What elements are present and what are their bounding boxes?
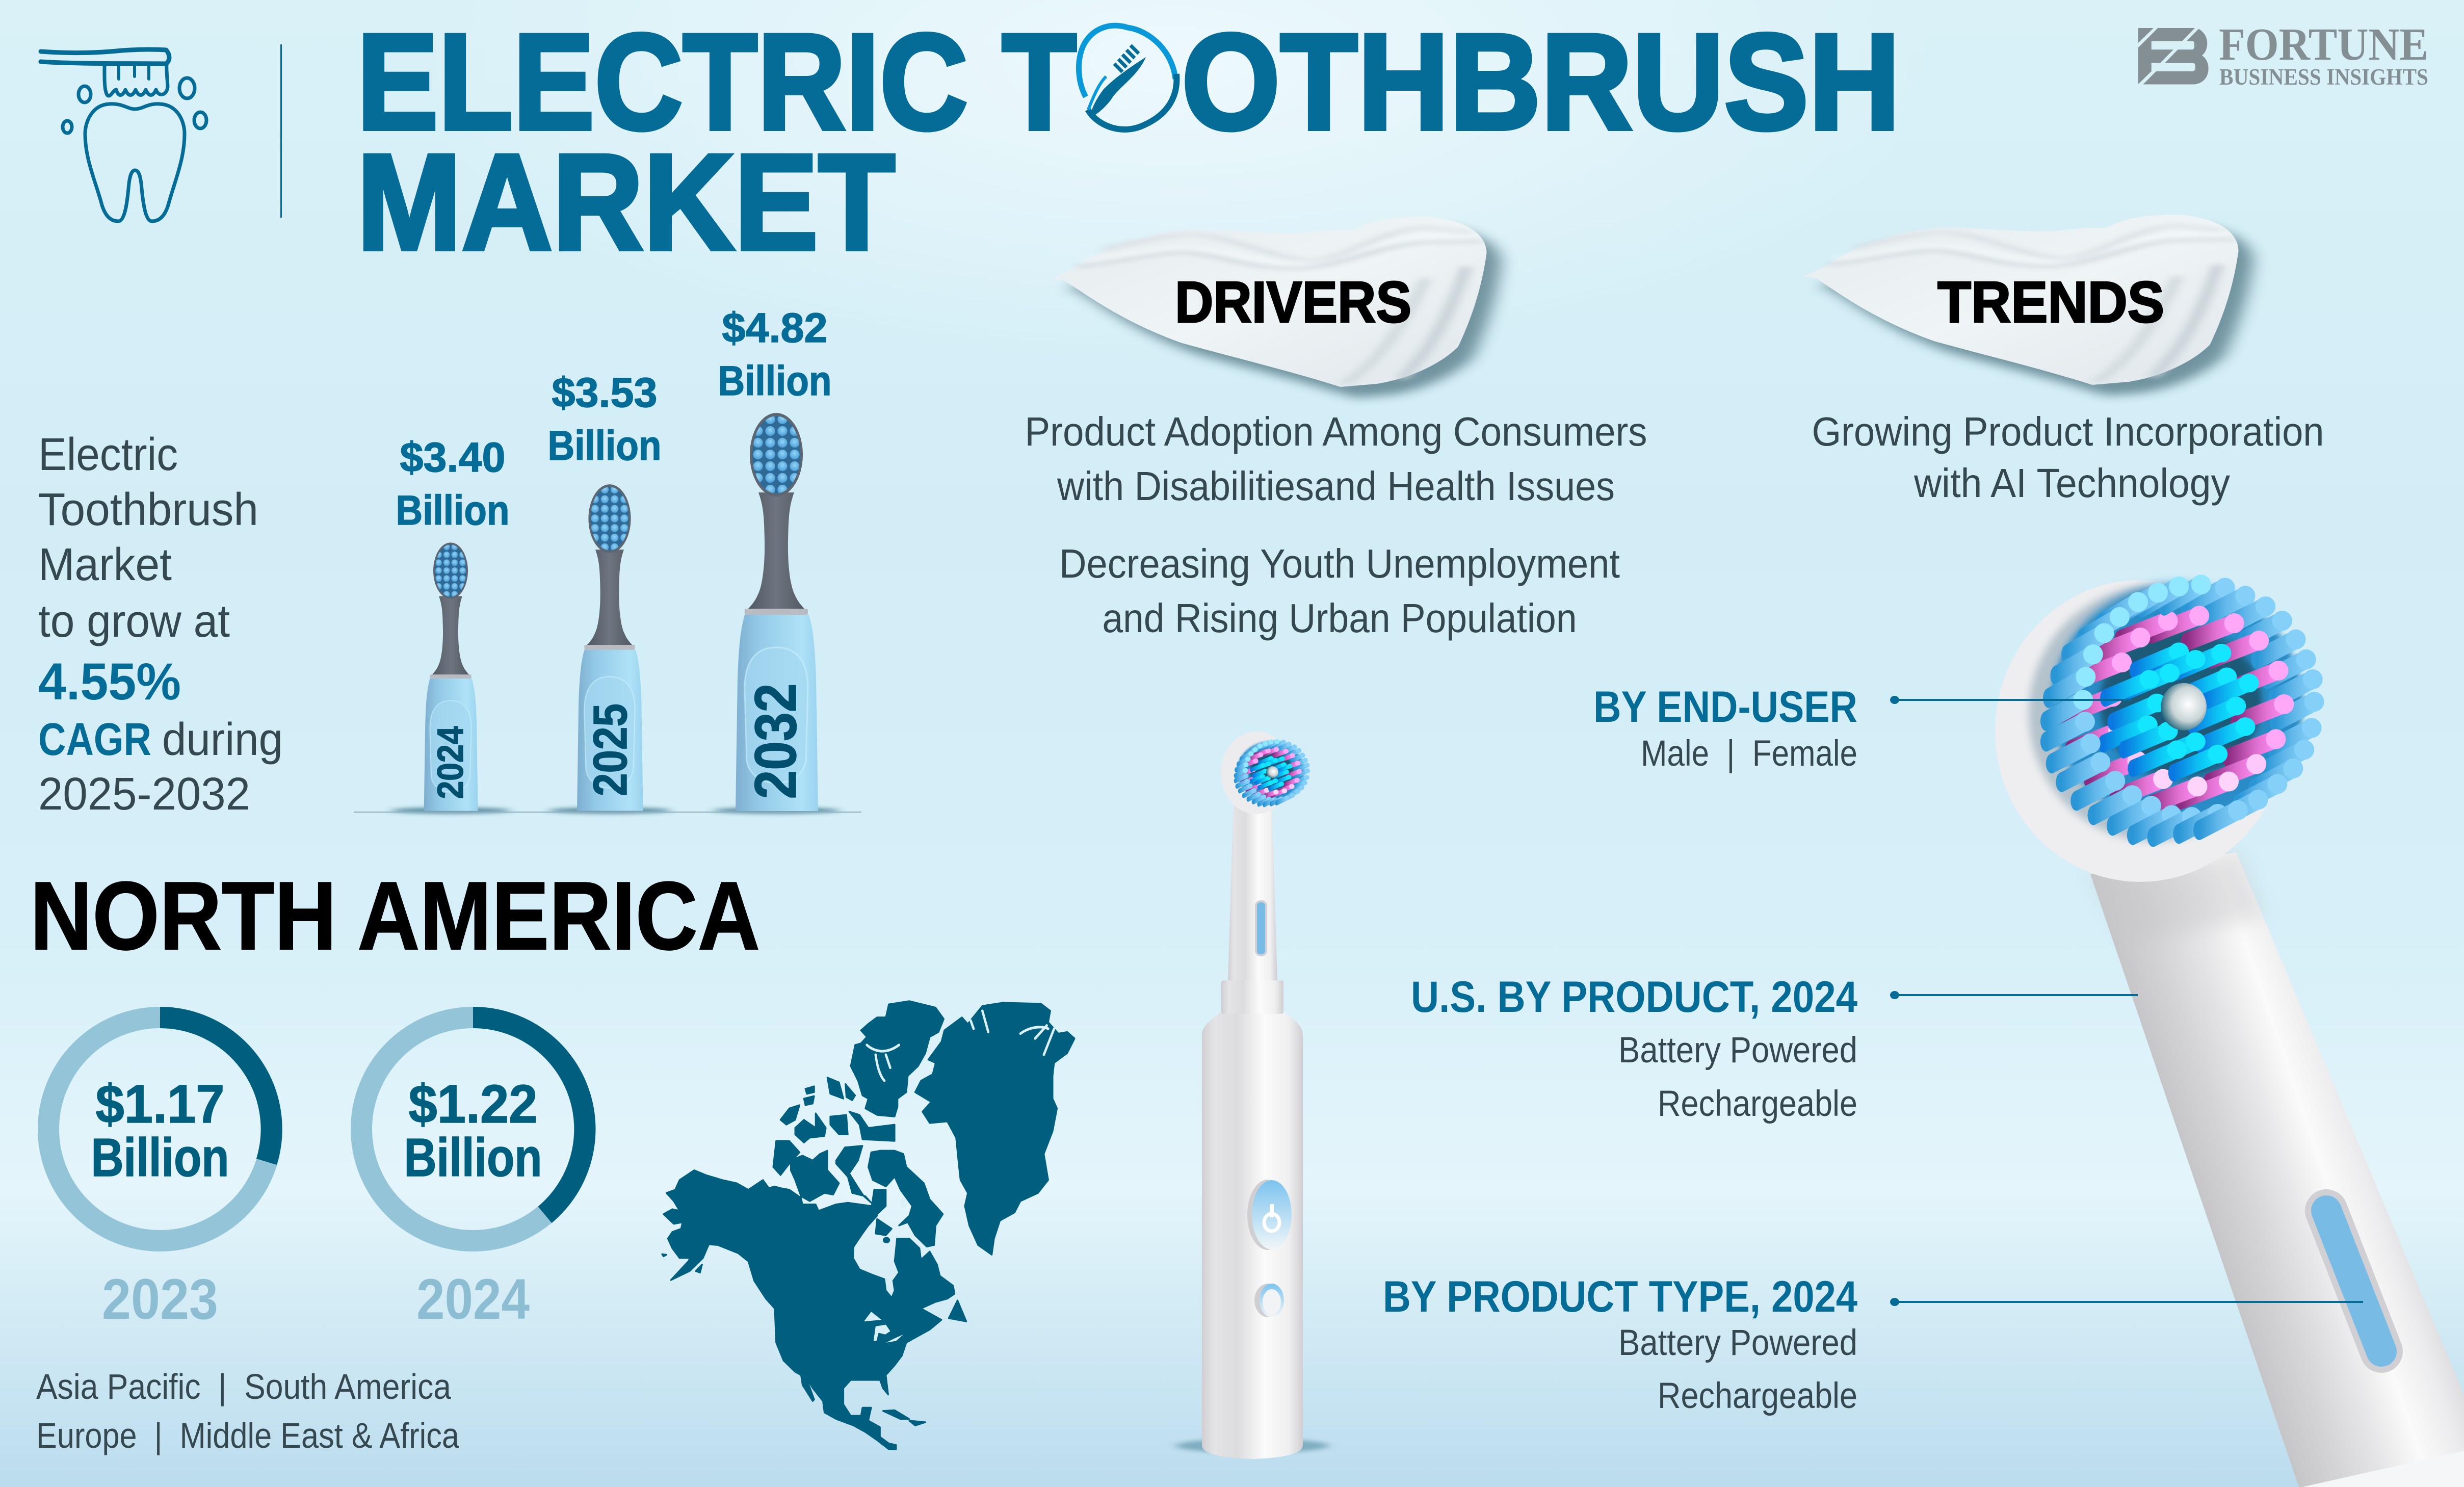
donut: 2023 [48, 1018, 272, 1331]
donut: 2024 [361, 1018, 585, 1331]
text: drivers list: Product Adoption Among Consumers [1025, 409, 1647, 454]
callout: by product type [1383, 1272, 2363, 1416]
icon: toothbrush in O of title [1079, 25, 1176, 129]
text: market growth summary: 4.55% [38, 653, 181, 711]
bar: 2025: Billion [547, 423, 662, 469]
text: trends list: Growing Product Incorporation [1812, 409, 2324, 454]
toothpaste blob: drivers [1052, 217, 1501, 398]
bar: 2032 [718, 305, 832, 811]
title: MARKET [357, 125, 895, 278]
logo: Fortune Business Insights: BUSINESS INSIGHTS [2219, 64, 2428, 90]
donut: 2024: Billion [404, 1128, 542, 1188]
donut: 2024: $1.22 [409, 1074, 537, 1134]
heading: trends: TRENDS [1937, 270, 2164, 335]
callout: U.S. by product [1411, 973, 2138, 1124]
text: drivers list [1025, 409, 1647, 641]
text: trends list: with AI Technology [1913, 460, 2230, 506]
text: trends list [1812, 409, 2324, 506]
callout: by product type: Battery Powered [1618, 1323, 1857, 1363]
text: other regions: Asia Pacific | South America [36, 1367, 451, 1406]
callout: by product type: Rechargeable [1658, 1376, 1857, 1416]
text: market growth summary: to grow at [38, 596, 230, 647]
text: drivers list: and Rising Urban Population [1102, 595, 1577, 641]
text: market growth summary: Market [38, 539, 172, 590]
text: other regions [36, 1367, 459, 1455]
bar: 2024: Billion [396, 487, 510, 534]
callout: by end-user: BY END-USER [1593, 683, 1857, 732]
bar: 2024: 2024 [431, 726, 471, 799]
heading: drivers: DRIVERS [1175, 270, 1411, 335]
callout: U.S. by product: Battery Powered [1618, 1030, 1857, 1071]
text: other regions: Europe | Middle East & Africa [36, 1416, 459, 1455]
indicator strip [2326, 1211, 2381, 1351]
illustration: large brush head [1995, 575, 2464, 1487]
bar: 2024 [396, 434, 510, 811]
heading: North America: NORTH AMERICA [30, 862, 760, 970]
panel: drivers [1025, 217, 1647, 641]
icon: tooth and brush [41, 49, 206, 221]
panel: trends [1804, 215, 2324, 506]
bar: 2032: 2032 [743, 683, 808, 799]
bar: 2024: $3.40 [400, 434, 506, 481]
divider [280, 44, 282, 218]
bar: 2025: 2025 [584, 703, 637, 796]
callout: U.S. by product: Rechargeable [1658, 1084, 1857, 1124]
toothpaste blob: trends [1804, 215, 2253, 396]
donut: 2023: $1.17 [96, 1074, 224, 1134]
donut: 2024: 2024 [416, 1267, 530, 1331]
callout: U.S. by product: U.S. BY PRODUCT, 2024 [1411, 973, 1857, 1022]
bar: 2032: Billion [718, 358, 832, 404]
donut: 2023: Billion [91, 1128, 229, 1188]
callout: by product type: BY PRODUCT TYPE, 2024 [1383, 1272, 1857, 1321]
map: North America [662, 1001, 1074, 1449]
donut: 2023: 2023 [102, 1267, 218, 1331]
callout: by end-user: Male | Female [1641, 734, 1857, 774]
text: market growth summary: Toothbrush [38, 484, 258, 535]
title [357, 5, 1900, 278]
title: ELECTRIC T [357, 5, 1077, 158]
text: market growth summary: Electric [38, 429, 178, 480]
title: OTHBRUSH [1182, 5, 1900, 158]
illustration: electric toothbrush small [1176, 732, 1329, 1459]
logo: Fortune Business Insights: FORTUNE [2219, 19, 2428, 70]
text: market growth summary: CAGR [38, 714, 151, 765]
bar: 2032: $4.82 [722, 305, 828, 351]
text: drivers list: Decreasing Youth Unemployment [1059, 541, 1620, 586]
text: market growth summary: during [162, 714, 283, 765]
bar: 2025: $3.53 [552, 370, 658, 416]
text: market growth summary: 2025-2032 [38, 769, 250, 820]
chart: toothbrush market size bars [354, 305, 861, 814]
callout: by end-user [1593, 683, 2131, 774]
logo: Fortune Business Insights [2138, 19, 2428, 90]
text: market growth summary [38, 429, 283, 820]
text: drivers list: with Disabilitiesand Health Issues [1057, 463, 1615, 509]
bar: 2025 [547, 370, 662, 811]
